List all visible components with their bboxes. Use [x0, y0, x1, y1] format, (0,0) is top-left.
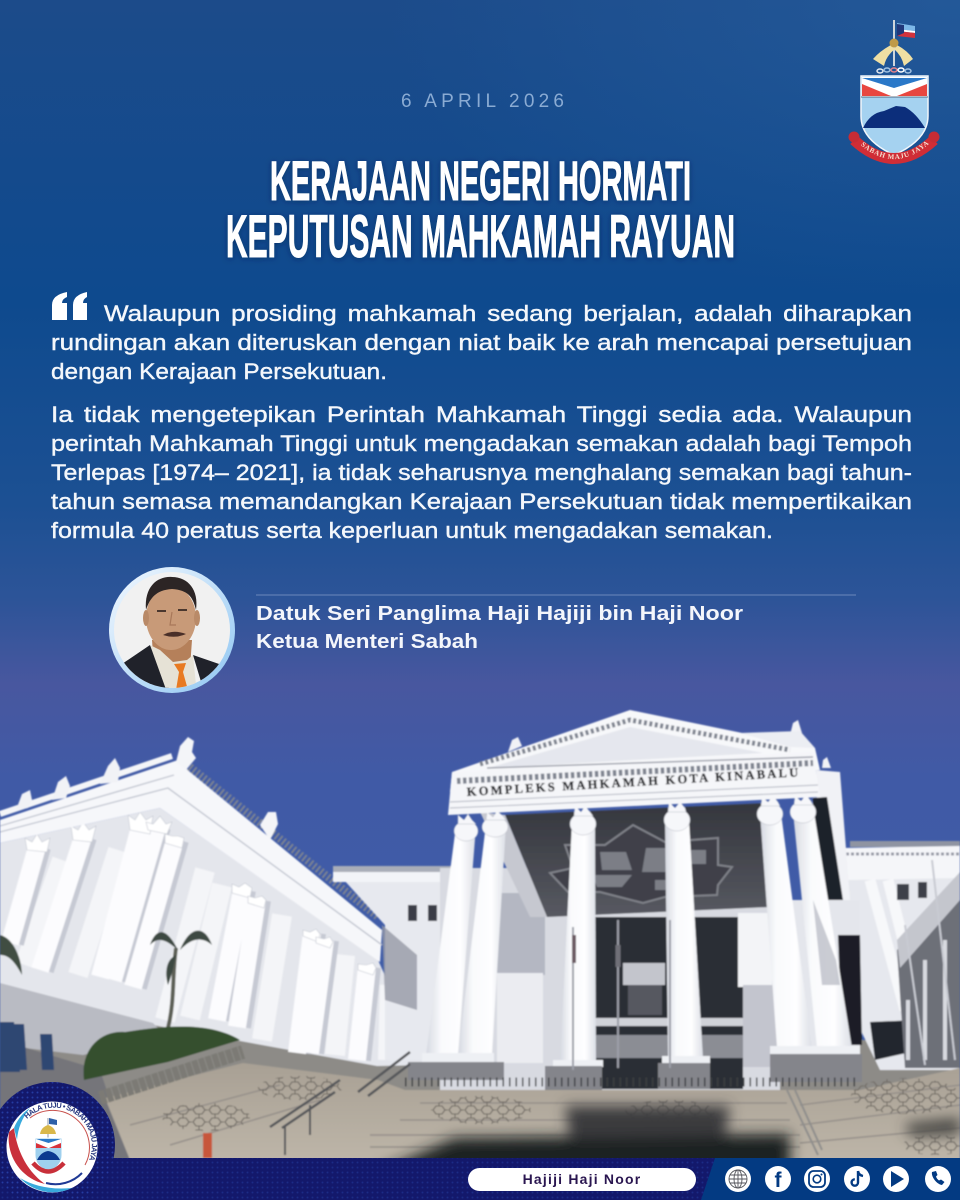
side tower	[816, 770, 850, 905]
icon: opening quotation mark	[52, 292, 87, 320]
icon: tiktok	[844, 1166, 870, 1192]
icon: facebook	[765, 1166, 791, 1192]
building: back wing centre	[333, 866, 453, 1060]
crest flag and pole	[894, 20, 915, 66]
building: main portico	[405, 710, 862, 1090]
people on steps	[0, 1022, 54, 1072]
inscription on the building: KOMPLEKS MAHKAMAH KOTA KINABALU	[466, 765, 799, 799]
wing capitals	[25, 812, 376, 975]
name pill: Hajiji Haji Noor	[523, 1171, 641, 1187]
date: 6 APRIL 2026	[401, 91, 564, 112]
photo: Kota Kinabalu court complex	[0, 710, 960, 1175]
quote paragraph two: formula 40 peratus serta keperluan untuk mengadakan semakan.	[51, 518, 773, 543]
tree shadows	[370, 1106, 960, 1175]
palm trees	[0, 931, 212, 1028]
speaker name and role: Datuk Seri Panglima Haji Hajiji bin Haji Noor	[256, 603, 743, 625]
icon: phone	[925, 1166, 951, 1192]
right diagonal wing	[897, 880, 960, 1068]
orange traffic cone	[203, 1133, 212, 1158]
quote paragraph one: dengan Kerajaan Persekutuan.	[51, 359, 387, 384]
quote paragraph two: tahun semasa memandangkan Kerajaan Persekutuan tidak mempertikaikan	[51, 489, 912, 514]
crest shield	[861, 76, 928, 155]
quote paragraph two: Terlepas [1974– 2021], ia tidak seharusnya menghalang semakan bagi tahun-	[51, 460, 912, 485]
title	[226, 149, 735, 270]
stepped side edge	[100, 1052, 243, 1098]
stairs	[100, 1052, 960, 1175]
portrait of Hajiji Noor	[109, 567, 235, 695]
speaker name and role	[256, 603, 743, 653]
lower walls and entrance	[440, 868, 780, 1090]
entablature	[448, 752, 820, 815]
icon: instagram	[804, 1166, 830, 1192]
lower retaining wall	[0, 983, 165, 1055]
quote paragraph one	[51, 301, 912, 384]
crest scroll	[848, 132, 940, 164]
badge crest	[33, 1118, 64, 1172]
quote paragraph two: perintah Mahkamah Tinggi untuk mengadakan semakan adalah bagi Tempoh	[51, 431, 912, 456]
icon: website globe	[725, 1166, 751, 1192]
column capitals	[454, 795, 816, 841]
name pill	[468, 1168, 696, 1191]
ground backing under the building	[0, 985, 960, 1160]
footer bar	[0, 1158, 960, 1200]
crest scroll: SABAH MAJU JAYA	[861, 142, 929, 160]
railing	[405, 1078, 860, 1086]
building: left wing	[0, 737, 425, 1160]
stone plinths	[408, 1054, 862, 1090]
building: right wing	[843, 841, 960, 1070]
badge swooshes	[9, 1108, 89, 1192]
icon: youtube play	[883, 1166, 909, 1192]
ground on the left	[0, 1040, 130, 1160]
wing cornice	[0, 760, 382, 962]
quote paragraph one: rundingan akan diteruskan dengan niat baik ke arah mencapai persetujuan	[51, 330, 912, 355]
wing balustrade and finials	[0, 737, 378, 917]
crest rings	[877, 68, 911, 73]
pediment	[450, 710, 820, 792]
ceiling star emblem	[550, 825, 732, 903]
badge motto: HALA TUJU • SABAH MAJU JAYA	[24, 1102, 98, 1160]
speaker name and role: Ketua Menteri Sabah	[256, 631, 478, 653]
finials on pediment	[508, 720, 831, 768]
speaker divider	[256, 594, 856, 596]
quote paragraph two	[51, 402, 912, 543]
columns	[426, 812, 852, 1062]
planting bed	[83, 1027, 240, 1080]
quote paragraph two: Ia tidak mengetepikan Perintah Mahkamah Tinggi sedia ada. Walaupun	[51, 402, 912, 427]
stair handrails	[270, 1052, 822, 1155]
quote paragraph one: Walaupun prosiding mahkamah sedang berjalan, adalah diharapkan	[104, 301, 912, 326]
bases	[422, 1046, 860, 1067]
crest hands	[873, 38, 913, 66]
flagpoles	[573, 920, 670, 1070]
stair scribble patterns	[162, 1076, 960, 1155]
state crest: Sabah coat of arms	[848, 20, 940, 164]
badge: Hala Tuju	[0, 1082, 115, 1198]
icon: facebook: f	[774, 1169, 782, 1192]
dark ceiling	[505, 803, 770, 917]
